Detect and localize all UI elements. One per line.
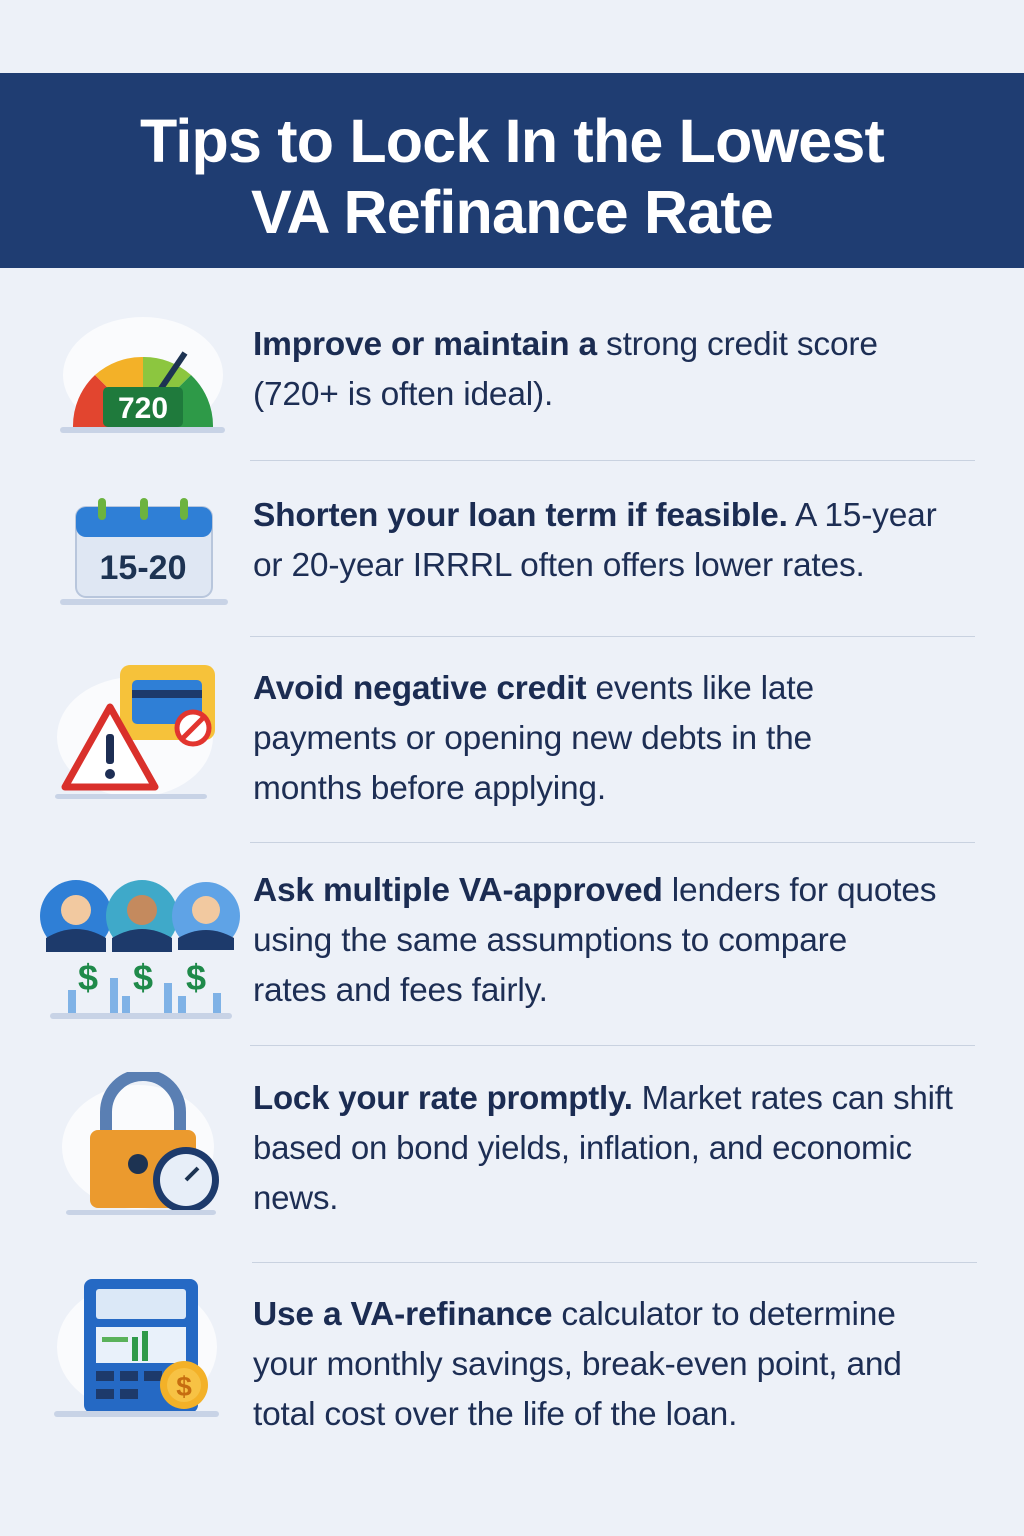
tip 5 text: based on bond yields, inflation, and economic	[253, 1129, 912, 1166]
tip 2 text	[253, 497, 937, 584]
tip 3 text	[253, 670, 814, 807]
title: VA Refinance Rate	[251, 178, 773, 246]
icon: credit gauge: 720	[118, 392, 168, 425]
tip 1 text	[253, 326, 878, 413]
icon: calendar	[60, 498, 228, 605]
tip 5 text: Lock your rate promptly. Market rates can shift	[253, 1079, 953, 1116]
icon: lenders: $	[133, 957, 153, 998]
tip 2 text: Shorten your loan term if feasible. A 15-year	[253, 497, 937, 534]
tip 5 text: news.	[253, 1179, 338, 1216]
title: Tips to Lock In the Lowest	[140, 107, 884, 175]
tip 6 text: Use a VA-refinance calculator to determine	[253, 1296, 896, 1333]
icon: calculator: $	[176, 1371, 192, 1402]
tip 6 text	[253, 1296, 902, 1433]
icon: lenders: $	[186, 957, 206, 998]
tip 1 text: (720+ is often ideal).	[253, 376, 553, 413]
tip 3 text: payments or opening new debts in the	[253, 720, 812, 757]
tip 1 text: Improve or maintain a strong credit score	[253, 326, 878, 363]
tip 3 text: Avoid negative credit events like late	[253, 670, 814, 707]
title	[0, 73, 1024, 268]
tip 6 text: total cost over the life of the loan.	[253, 1396, 737, 1433]
tip 4 text: Ask multiple VA-approved lenders for quotes	[253, 872, 936, 909]
icon: warning and card	[55, 665, 215, 799]
icon: lenders: $	[78, 957, 98, 998]
icon: credit gauge	[60, 317, 225, 433]
tip 3 text: months before applying.	[253, 770, 606, 807]
icon: lock with clock	[62, 1072, 219, 1215]
tip 5 text	[253, 1079, 953, 1216]
tip 6 text: your monthly savings, break-even point, and	[253, 1346, 902, 1383]
icon: calendar: 15-20	[100, 549, 186, 587]
tip 4 text: rates and fees fairly.	[253, 972, 548, 1009]
icon: lenders	[40, 880, 240, 1019]
tip 2 text: or 20-year IRRRL often offers lower rates.	[253, 547, 865, 584]
tip 4 text	[253, 872, 936, 1009]
tip 4 text: using the same assumptions to compare	[253, 922, 847, 959]
icon: calculator	[54, 1279, 219, 1417]
